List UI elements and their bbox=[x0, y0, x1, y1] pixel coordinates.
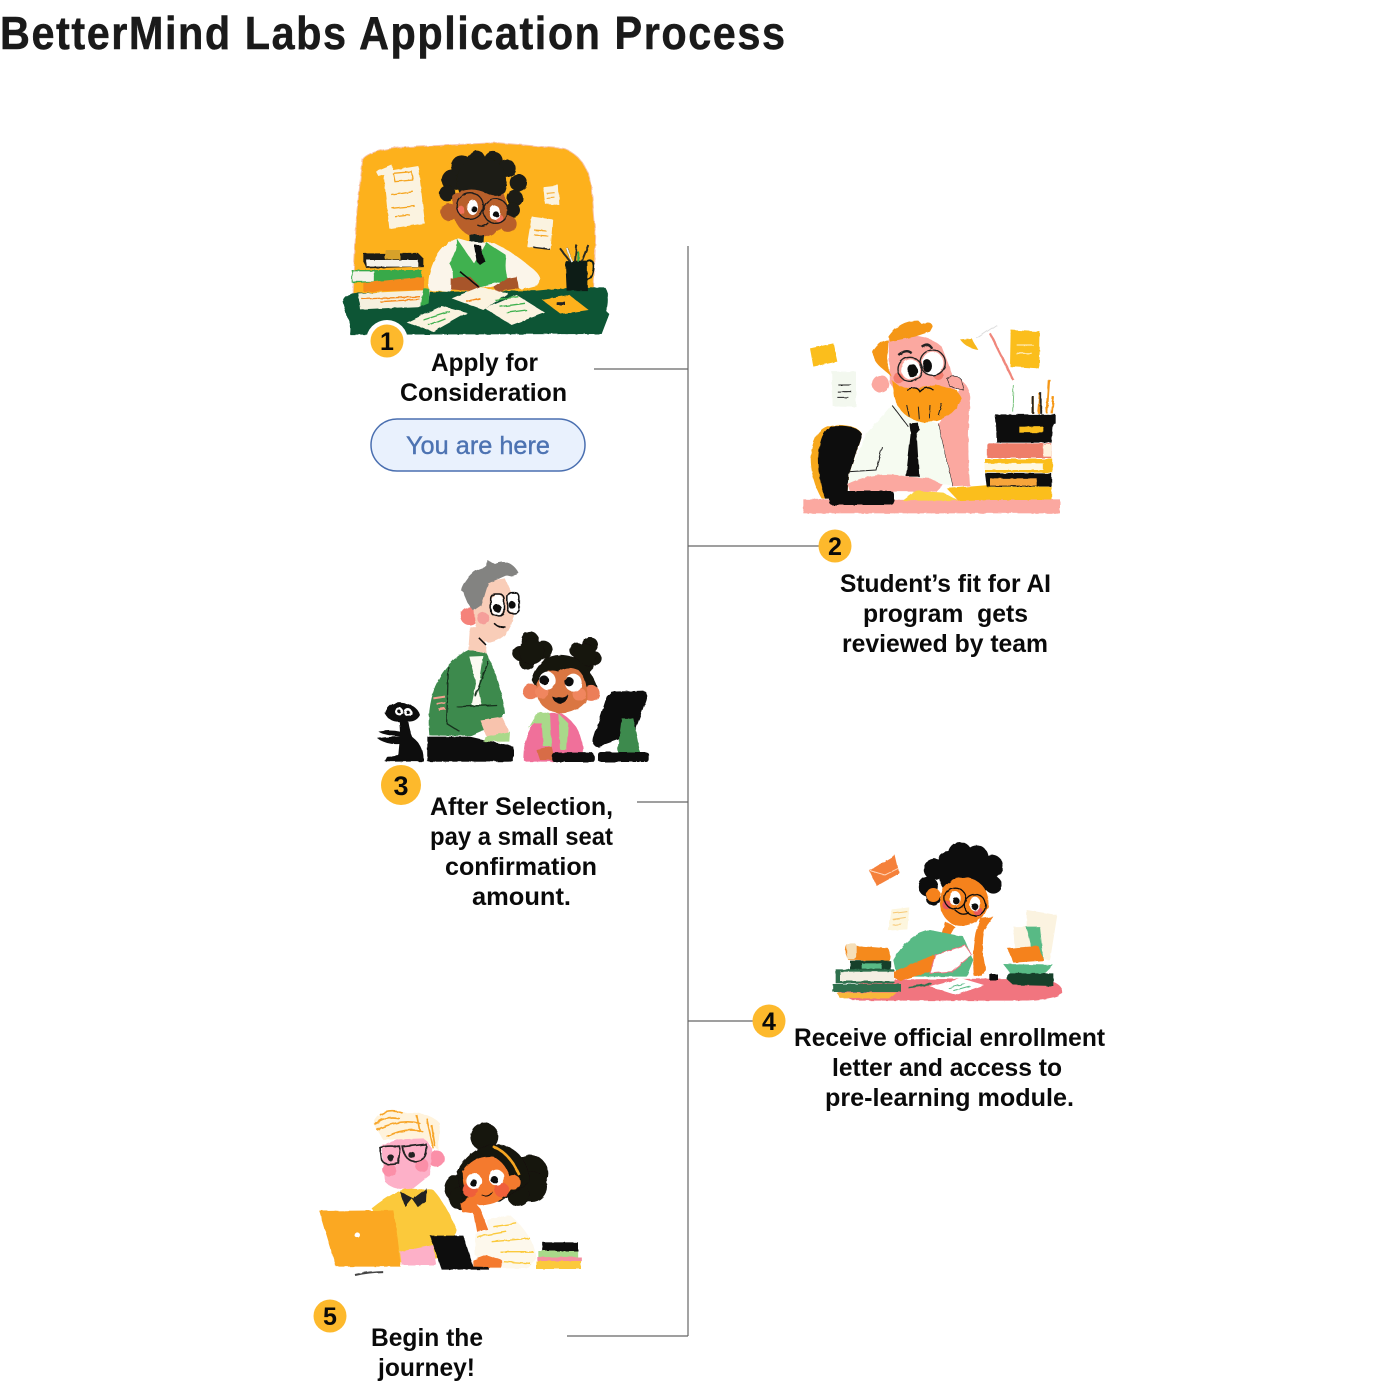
boy laptop bbox=[319, 1210, 401, 1267]
step 3 label: amount. bbox=[472, 883, 571, 911]
notes bbox=[810, 343, 837, 367]
step 4 label: letter and access to bbox=[832, 1054, 1062, 1082]
illustration: bearded reviewer at desk bbox=[803, 321, 1060, 513]
girl bbox=[513, 631, 602, 697]
step 4 label: Receive official enrollment bbox=[794, 1024, 1106, 1052]
hair bbox=[439, 151, 527, 217]
step 1 label: Apply for bbox=[431, 349, 538, 377]
step 4 number badge: 4 bbox=[762, 1008, 776, 1036]
step 2 number badge bbox=[818, 530, 852, 562]
monitor bbox=[552, 753, 594, 762]
step 5 label: journey! bbox=[377, 1354, 475, 1382]
step 3 number badge: 3 bbox=[393, 771, 409, 801]
book bbox=[902, 491, 958, 501]
arm bbox=[847, 475, 943, 492]
man body bbox=[427, 737, 513, 762]
hair bbox=[918, 842, 1003, 906]
cat bbox=[377, 703, 424, 762]
stack bbox=[995, 414, 1056, 443]
illustration: student receiving enrollment letter bbox=[833, 842, 1063, 1001]
left books bbox=[845, 945, 890, 962]
step 3 label: After Selection, bbox=[430, 793, 613, 821]
step 3 label bbox=[430, 793, 614, 911]
desk bbox=[837, 978, 1063, 1001]
boy bbox=[372, 1188, 457, 1265]
step 2 label: Student’s fit for AI bbox=[840, 570, 1051, 598]
shirt bbox=[847, 405, 970, 485]
step 4 label: pre-learning module. bbox=[825, 1084, 1074, 1112]
you are here pill bbox=[371, 419, 585, 471]
illustration: mentor and child at a computer with cat bbox=[377, 560, 649, 762]
paper on desk bbox=[930, 978, 984, 995]
lamp bbox=[990, 333, 1013, 380]
torso bbox=[893, 930, 973, 977]
head bbox=[872, 375, 889, 393]
mug bbox=[565, 261, 587, 291]
girl bbox=[444, 1123, 548, 1210]
step 4 number badge bbox=[752, 1004, 786, 1038]
book stack bbox=[543, 1242, 578, 1251]
step 5 number badge bbox=[314, 1300, 346, 1332]
step 2 number badge: 2 bbox=[828, 533, 842, 561]
step 1 label: Consideration bbox=[400, 379, 567, 407]
step 3 number badge bbox=[381, 765, 421, 805]
step 2 label bbox=[840, 570, 1051, 658]
you are here pill: You are here bbox=[406, 432, 550, 460]
illustration: student filling in application at desk bbox=[343, 143, 609, 335]
step 1 number badge: 1 bbox=[380, 328, 394, 356]
step 1 number badge bbox=[366, 320, 408, 362]
pencils bbox=[1033, 379, 1053, 413]
title: BetterMind Labs Application Process bbox=[0, 8, 785, 60]
step 3 label: confirmation bbox=[445, 853, 597, 881]
step 2 label: program gets bbox=[863, 600, 1028, 628]
step 5 number badge: 5 bbox=[323, 1303, 337, 1331]
books bbox=[363, 253, 423, 268]
step 4 label bbox=[794, 1024, 1106, 1112]
step 5 label bbox=[371, 1324, 483, 1382]
step 1 label bbox=[400, 349, 567, 407]
step 3 label: pay a small seat bbox=[430, 823, 614, 851]
step 5 label: Begin the bbox=[371, 1324, 483, 1352]
step 2 label: reviewed by team bbox=[842, 630, 1048, 658]
illustration: two students with laptops bbox=[319, 1111, 581, 1275]
right items bbox=[1013, 910, 1057, 960]
timeline connector bbox=[567, 246, 820, 1336]
